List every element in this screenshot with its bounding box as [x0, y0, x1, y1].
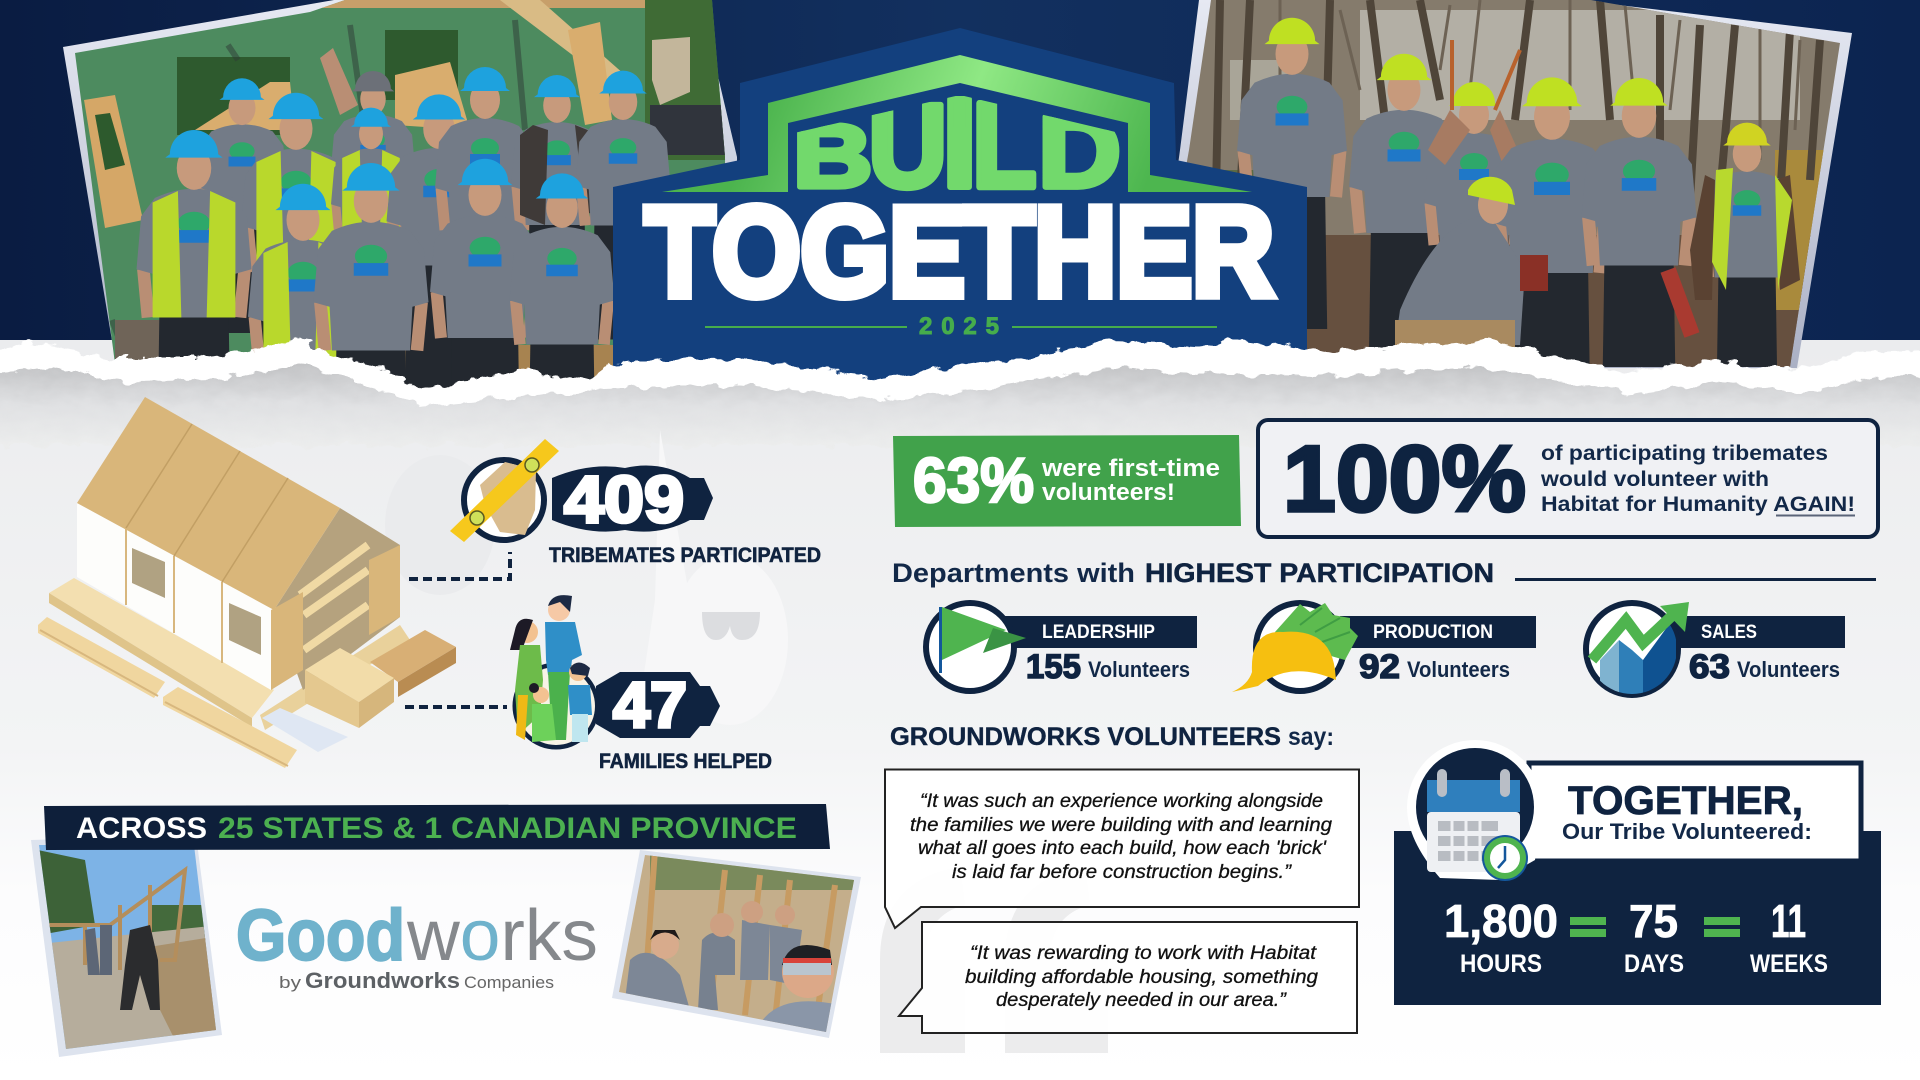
gable interior — [274, 508, 400, 690]
banner: across 25 states — [44, 804, 830, 850]
quote bubble 2: “It was rewarding to work with Habitat — [970, 943, 1317, 964]
stat: 47 families — [510, 595, 772, 773]
label: FAMILIES HELPED — [599, 750, 772, 773]
quote bubble 1: what all goes into each build, how each 'brick' — [918, 838, 1327, 859]
department: sales: SALES — [1701, 622, 1757, 643]
quote bubble 1 — [885, 770, 1359, 928]
photo: team in the woods — [1178, 0, 1852, 368]
icon: hard hat and gloves — [1232, 603, 1358, 692]
quote bubble 1: “It was such an experience working alongside — [920, 791, 1323, 812]
illustration: wooden house — [38, 397, 456, 768]
panel: together totals: DAYS — [1624, 950, 1684, 978]
value: days: 75 — [1629, 895, 1678, 947]
paper background — [0, 340, 1920, 1080]
logo: Build Together 2025 badge — [613, 28, 1307, 395]
department: leadership: Volunteers — [1088, 657, 1190, 682]
callout: 100% would volunteer — [1258, 420, 1878, 537]
callout: 100% would volunteer: 100% — [1283, 426, 1526, 531]
quote bubble 1: the families we were building with and learning — [910, 815, 1332, 836]
icon: rising chart — [1586, 602, 1689, 700]
word BUILD: D — [1038, 96, 1121, 210]
icon: family — [510, 595, 597, 747]
logo: Goodworks: Groundworks — [305, 968, 460, 993]
dashed connector to 47 — [405, 705, 507, 709]
lumber piles — [38, 617, 165, 698]
department: production: 92 — [1359, 648, 1400, 686]
wood stacks — [370, 630, 456, 682]
icon: fist with level — [450, 439, 559, 542]
callout: 100% would volunteer: of participating tribemates — [1541, 442, 1828, 465]
equals sign — [1570, 917, 1606, 937]
label: TRIBEMATES PARTICIPATED — [549, 544, 821, 567]
panel: together totals: HOURS — [1460, 950, 1542, 978]
foundation deck — [49, 578, 274, 718]
word BUILD: I — [942, 72, 978, 215]
green roof outline — [662, 55, 1252, 192]
heading: departments: HIGHEST PARTICIPATION — [1145, 558, 1494, 588]
roof — [77, 397, 340, 610]
callout: 63% first-time: were first-time — [1041, 455, 1220, 482]
panel: together totals: Our Tribe Volunteered: — [1562, 819, 1812, 844]
photo: selfie at framed house — [610, 845, 861, 1040]
word TOGETHER: TOGETHER — [645, 180, 1274, 322]
number badge — [552, 466, 713, 532]
value: hours: 1,800 — [1444, 895, 1558, 947]
year 2025: 2025 — [919, 313, 999, 340]
quote bubble 2 — [899, 922, 1357, 1033]
department: production: Volunteers — [1407, 657, 1510, 682]
banner: across 25 states: 25 STATES & 1 CANADIAN PROVINCE — [218, 812, 797, 845]
logo: Goodworks: by — [279, 973, 302, 992]
heading: departments: Departments with — [892, 558, 1135, 588]
panel: together totals — [1394, 740, 1881, 1005]
department: leadership: 155 — [1026, 648, 1081, 686]
torn paper edge — [0, 338, 1920, 446]
word BUILD: L — [972, 78, 1037, 214]
callout: 100% would volunteer: would volunteer with — [1540, 468, 1769, 491]
photo: framing a wall — [30, 835, 230, 1060]
icon: calendar with clock — [1407, 740, 1543, 881]
value 47: 47 — [613, 669, 687, 741]
panel: together totals: WEEKS — [1750, 950, 1828, 978]
blue panels — [262, 708, 348, 752]
dashed connector to 409 — [409, 552, 510, 579]
background watermark photo — [385, 430, 788, 725]
callout: 100% would volunteer: Habitat for Humanity AGAIN! — [1541, 493, 1855, 516]
word BUILD — [797, 96, 1120, 192]
department: production — [1232, 603, 1536, 692]
value 409: 409 — [564, 462, 684, 536]
heading: volunteers say: GROUNDWORKS VOLUNTEERS — [890, 723, 1281, 751]
quote bubble 2: desperately needed in our area.” — [996, 990, 1288, 1011]
heading: volunteers say: say: — [1288, 723, 1334, 751]
equals sign — [1704, 917, 1740, 937]
department: sales: 63 — [1689, 648, 1730, 686]
icon: flag — [926, 603, 1026, 691]
photo: team at green wall — [63, 0, 738, 388]
number badge — [596, 672, 720, 738]
department: sales: Volunteers — [1737, 657, 1840, 682]
department: leadership — [926, 603, 1197, 691]
title text: TOGETHER, — [1568, 779, 1803, 823]
stat: 409 tribemates — [450, 439, 821, 567]
word BUILD: B — [793, 106, 872, 207]
heading: departments — [892, 558, 1876, 588]
callout: 63% first-time: volunteers! — [1042, 479, 1175, 506]
logo: Goodworks — [236, 896, 598, 993]
logo: Goodworks: Companies — [464, 973, 554, 992]
side wall — [77, 503, 274, 690]
department: leadership: LEADERSHIP — [1042, 622, 1155, 643]
logo: Goodworks: works — [406, 896, 598, 976]
navy panel — [1394, 831, 1881, 1005]
navy header background — [0, 0, 1920, 400]
quote bubble 2: building affordable housing, something — [965, 967, 1318, 988]
callout: 63% first-time: 63% — [913, 446, 1034, 516]
banner: across 25 states: ACROSS — [76, 812, 207, 845]
quote bubble 1: is laid far before construction begins.” — [952, 862, 1293, 883]
department: sales — [1586, 602, 1845, 700]
department: production: PRODUCTION — [1373, 622, 1493, 643]
callout: 63% first-time — [893, 435, 1241, 527]
value: weeks: 11 — [1771, 895, 1806, 947]
watermark quote mark — [880, 867, 1108, 1053]
logo: Goodworks: Good — [236, 896, 405, 976]
white title box — [1529, 763, 1861, 861]
word BUILD: U — [868, 80, 947, 213]
